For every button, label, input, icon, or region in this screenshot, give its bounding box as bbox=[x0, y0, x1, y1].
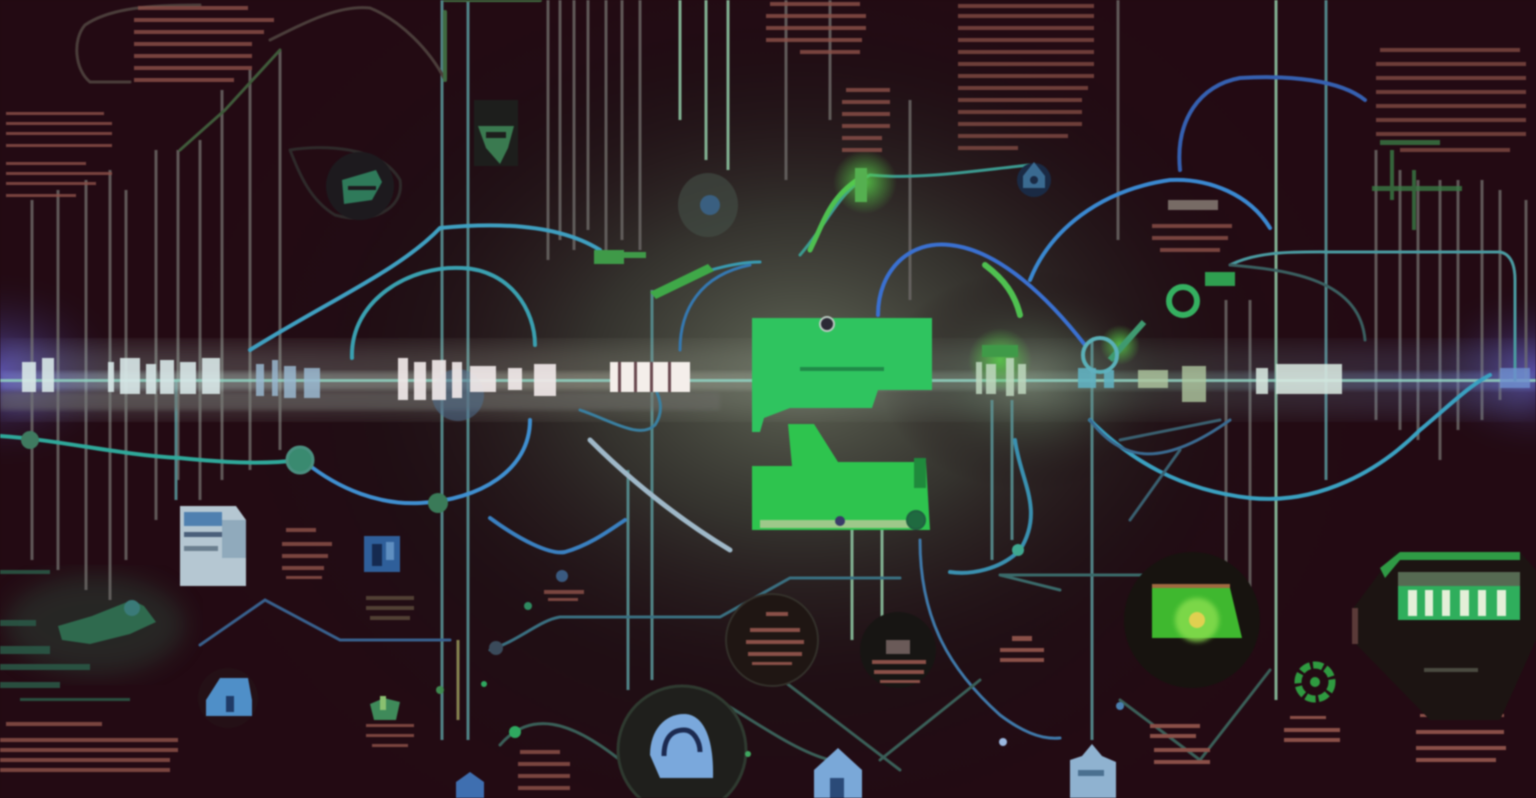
node text 2 bbox=[860, 612, 936, 688]
lower centre text nodes bbox=[726, 594, 1506, 764]
text block: far left bbox=[6, 112, 112, 197]
curve: central dark diagonal bbox=[590, 440, 730, 550]
text block: right centre bbox=[1152, 200, 1232, 252]
curve: lower ring bbox=[305, 420, 530, 503]
curve: centre right down bbox=[950, 440, 1031, 573]
icon: green leaf small bbox=[370, 696, 400, 720]
lower-left text blocks bbox=[0, 528, 584, 790]
top pseudo-text blocks bbox=[6, 2, 1526, 252]
node text 7 bbox=[1416, 704, 1506, 762]
node text 1 bbox=[726, 594, 818, 686]
icon: large blue dome bbox=[618, 686, 746, 798]
node text 5 bbox=[1150, 724, 1210, 764]
horizontal light band bbox=[0, 345, 1536, 415]
band pseudo-headline bbox=[22, 358, 1530, 402]
icon: right server panel bbox=[1352, 552, 1536, 720]
left green map bbox=[0, 570, 156, 701]
curve: right top rail bbox=[1230, 252, 1515, 380]
green panel: upper bbox=[752, 318, 932, 432]
icon: small gear bbox=[700, 195, 720, 215]
curve: ring left bbox=[352, 268, 535, 358]
curve: center blue arc bbox=[878, 244, 1085, 345]
curve: right lower sweep bbox=[1090, 375, 1490, 499]
curve: upper-left outline bbox=[77, 5, 445, 82]
icon: top right blue pin bbox=[1017, 162, 1051, 197]
text block: centre column bbox=[842, 88, 890, 152]
icon: document card bbox=[180, 506, 246, 586]
curve: right arc bbox=[1030, 180, 1270, 280]
icon: bottom pins bbox=[456, 744, 1116, 798]
green panel: lower bbox=[752, 424, 930, 530]
glow nodes bbox=[21, 150, 1235, 513]
right green stripes bbox=[1372, 140, 1462, 230]
text block: below blue square bbox=[366, 596, 414, 620]
icon: upper left circle badge bbox=[326, 152, 394, 220]
icon: green ring bbox=[1298, 665, 1332, 699]
text block: top left bbox=[134, 6, 274, 82]
text block: under left icons bbox=[366, 724, 414, 747]
curve: lower network bbox=[200, 600, 450, 645]
curve: left green line bbox=[0, 436, 300, 463]
text block: tall bbox=[958, 4, 1094, 150]
small scattered dots bbox=[436, 544, 1124, 757]
text block: beside icon bbox=[282, 528, 332, 579]
text block: bottom left bbox=[0, 722, 178, 772]
icon: bright green screen bbox=[1124, 552, 1260, 688]
central green speech panels bbox=[752, 317, 932, 530]
icon: upper document bbox=[474, 100, 518, 166]
icon: left blue house bbox=[198, 668, 258, 728]
curve: upper left arc bbox=[250, 225, 600, 350]
node text 3 bbox=[1000, 636, 1044, 662]
node text 6 bbox=[1284, 716, 1340, 742]
text block: mini centre bbox=[544, 590, 584, 601]
curve: upper middle bbox=[660, 262, 760, 290]
text block: top right bbox=[1376, 48, 1526, 152]
node text 4 bbox=[1162, 650, 1228, 677]
text block: top centre bbox=[766, 2, 866, 54]
icon: blue square bbox=[364, 536, 400, 572]
